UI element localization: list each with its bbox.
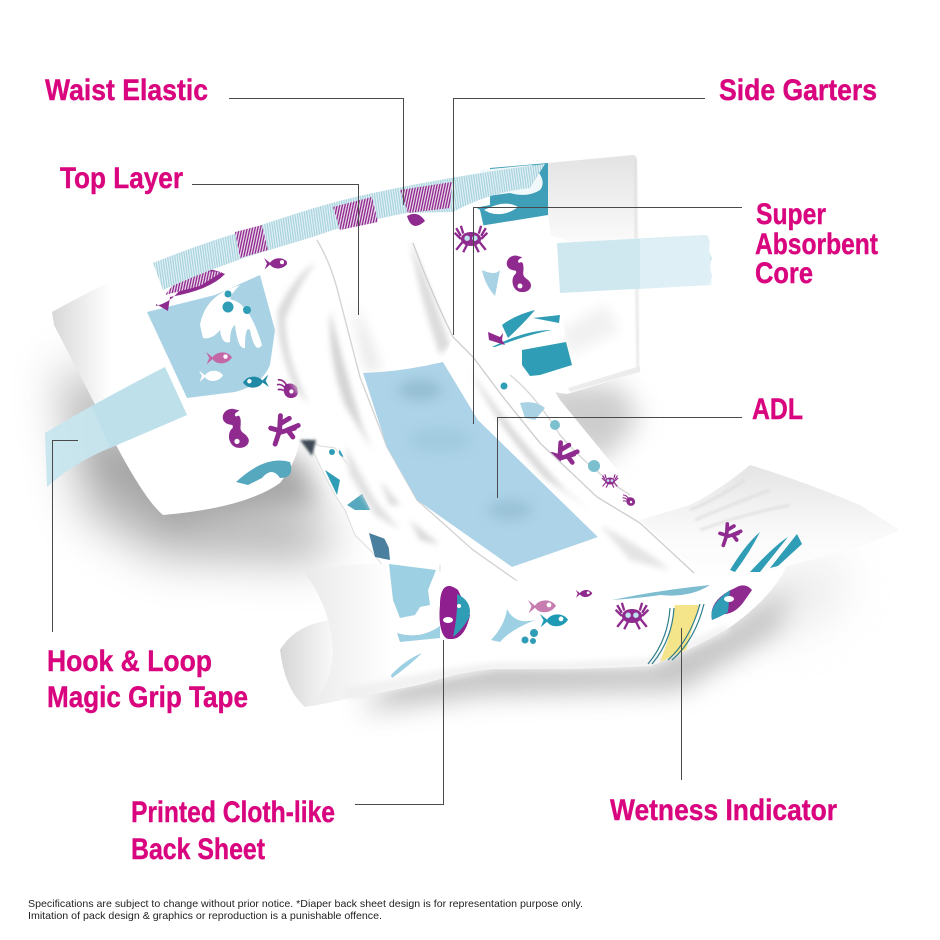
left leg elastic with print: [300, 440, 440, 575]
leader line: printed back sheet: [355, 640, 444, 804]
heading: Hook and Loop Magic Grip Tape: Magic Grip Tape: [47, 681, 248, 714]
teal whale panel: [455, 163, 548, 227]
heading: ADL: ADL: [752, 393, 803, 426]
left wing: [45, 228, 320, 515]
waist elastic band: [153, 164, 545, 290]
heading: Printed Cloth-like Back Sheet: Back Sheet: [131, 833, 265, 866]
wetness indicator stripes: [648, 604, 704, 664]
right inner cuff: [413, 243, 694, 590]
big fish on back sheet: [439, 586, 470, 639]
leader line: ADL: [498, 418, 742, 498]
leader line: wetness indicator: [680, 628, 682, 780]
left inner cuff: [278, 240, 530, 590]
leader line: side garters: [454, 98, 705, 335]
heading: Super Absorbent Core: Super: [756, 198, 826, 231]
teal wave: [236, 461, 291, 485]
back inner area: [285, 190, 700, 590]
right back wing: [455, 155, 712, 394]
heading: Waist Elastic: Waist Elastic: [45, 74, 208, 107]
printed panel with wave: [147, 268, 275, 398]
heading: Super Absorbent Core: [755, 198, 878, 290]
heading: Hook and Loop Magic Grip Tape: Hook & Loop: [47, 645, 212, 678]
heading: Side Garters: Side Garters: [719, 74, 877, 107]
drop shadows: [60, 370, 850, 712]
right tail: [640, 465, 900, 580]
leader line: top layer: [192, 184, 358, 315]
leader line: waist elastic: [229, 98, 404, 205]
heading: Wetness Indicator: Wetness Indicator: [610, 794, 837, 827]
heading: Top Layer: Top Layer: [60, 162, 183, 195]
heading: Printed Cloth-like Back Sheet: [131, 796, 335, 866]
leader line: hook and loop tape: [52, 440, 78, 632]
super absorbent core: [363, 362, 598, 567]
heading: Hook and Loop Magic Grip Tape: [47, 645, 248, 714]
heading: Super Absorbent Core: Absorbent: [755, 228, 878, 261]
mirror fish: [711, 585, 752, 620]
tape: right fastening strip: [557, 235, 712, 293]
print: pale blue shapes: [389, 564, 710, 678]
footer disclaimer: [28, 898, 583, 922]
printed front panel: [303, 564, 787, 707]
footer disclaimer: Imitation of pack design & graphics or reproduction is a punishable offence.: [28, 910, 382, 922]
heading: Printed Cloth-like Back Sheet: Printed Cloth-like: [131, 796, 335, 829]
right leg gather with print: [455, 215, 640, 510]
tape: hook and loop strip: [45, 367, 187, 487]
heading: Super Absorbent Core: Core: [755, 257, 813, 290]
leg waterproof back tube: [280, 620, 345, 707]
footer disclaimer: Specifications are subject to change without prior notice. *Diaper back sheet design is for representation purpose only.: [28, 898, 583, 910]
leader line: super absorbent core: [474, 208, 742, 424]
